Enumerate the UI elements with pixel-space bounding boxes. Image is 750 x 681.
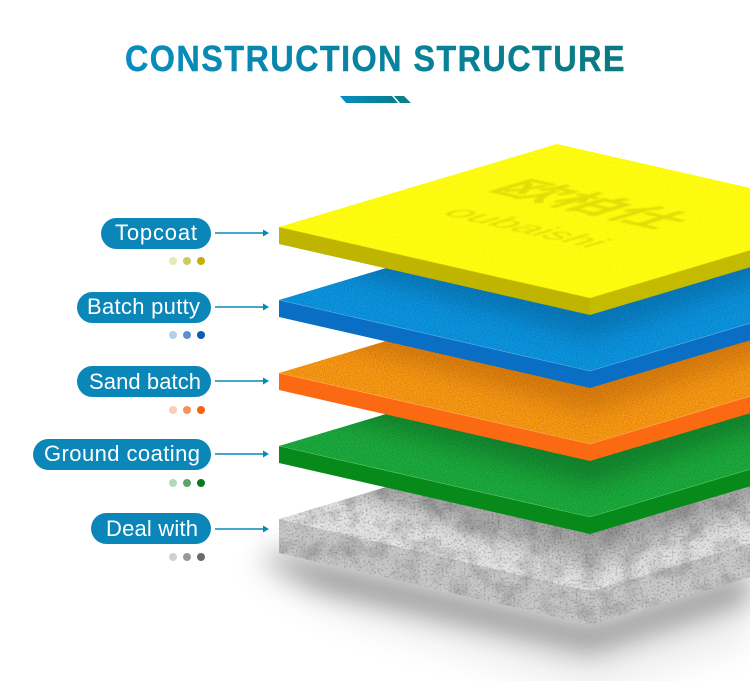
title underline accent	[340, 96, 411, 103]
layer: orange sand batch	[279, 330, 750, 461]
label: Ground coating	[33, 439, 269, 487]
label: Topcoat	[101, 218, 269, 265]
watermark on topcoat	[432, 176, 706, 250]
watermark on topcoat: oubaishi	[432, 204, 621, 250]
label: Batch putty	[77, 292, 269, 339]
watermark on topcoat: 欧柏仕	[475, 176, 706, 233]
layer: green ground coating	[279, 402, 750, 534]
layer: concrete base	[279, 486, 750, 624]
floor shadow	[250, 553, 750, 681]
layer: blue batch putty	[279, 258, 750, 388]
title: CONSTRUCTION STRUCTURE	[125, 39, 625, 79]
label: Sand batch: Sand batch	[89, 369, 201, 394]
label: Topcoat: Topcoat	[115, 220, 197, 245]
layer: yellow topcoat	[279, 144, 750, 315]
label: Deal with: Deal with	[106, 516, 198, 541]
label: Deal with	[91, 513, 269, 561]
label: Batch putty: Batch putty	[87, 294, 200, 319]
label: Sand batch	[77, 366, 269, 414]
label: Ground coating: Ground coating	[44, 441, 200, 466]
